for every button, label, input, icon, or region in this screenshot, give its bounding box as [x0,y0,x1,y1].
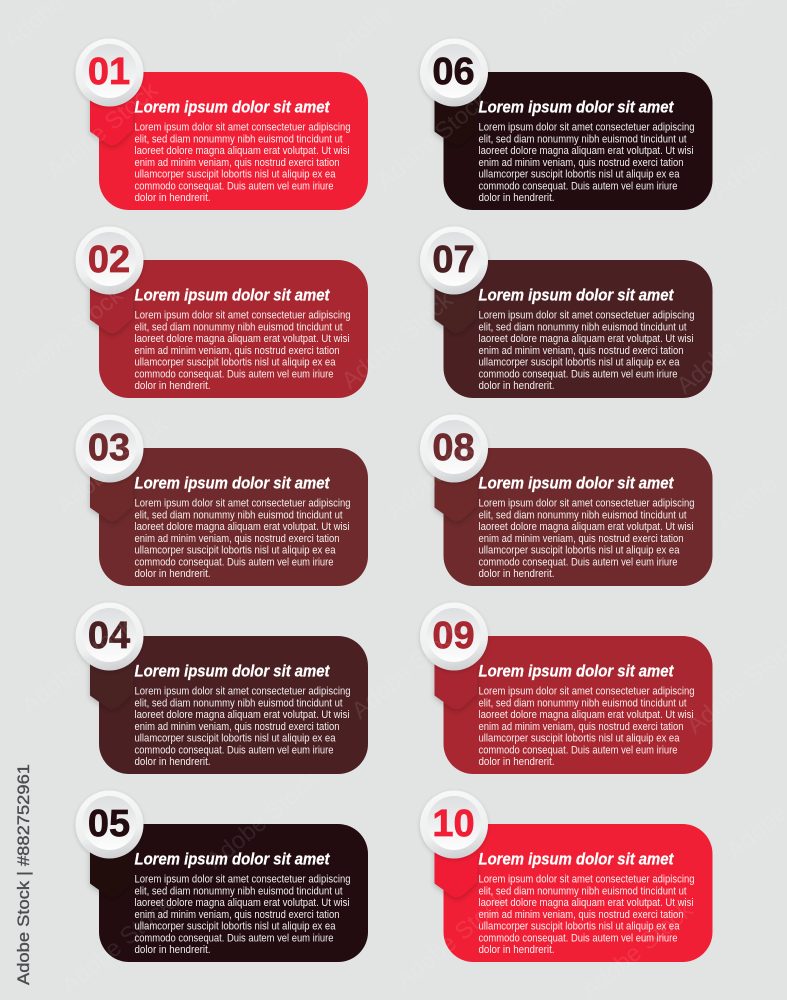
heading: Lorem ipsum dolor sit amet [478,286,675,304]
body text: laoreet dolore magna aliquam erat volutpat. Ut wisi [134,897,350,909]
body text: dolor in hendrerit. [134,380,210,392]
watermark pattern: Adobe Stock [42,76,164,185]
badge: 06: 06 [432,51,475,93]
panel: card 03 background [99,448,368,586]
body text: dolor in hendrerit. [134,568,210,580]
body text: enim ad minim veniam, quis nostrud exerci tation [134,157,340,169]
body text: enim ad minim veniam, quis nostrud exerci tation [134,909,340,921]
body text: ullamcorper suscipit lobortis nisl ut aliquip ex ea [134,168,336,180]
body text: dolor in hendrerit. [478,380,554,392]
badge: 07: 07 [432,239,475,281]
body text: laoreet dolore magna aliquam erat volutpat. Ut wisi [478,521,694,533]
body text: elit, sed diam nonummy nibh euismod tincidunt ut [478,885,686,897]
body text: dolor in hendrerit. [478,944,554,956]
badge: 09 [420,602,488,670]
card 04 [76,602,368,774]
badge: 03 [76,414,144,482]
body text: Lorem ipsum dolor sit amet consectetuer adipiscing [134,310,350,322]
panel: card 01 background [99,72,368,210]
body text: elit, sed diam nonummy nibh euismod tincidunt ut [478,133,686,145]
body text: elit, sed diam nonummy nibh euismod tincidunt ut [134,697,342,709]
body text: enim ad minim veniam, quis nostrud exerci tation [478,909,684,921]
body text: commodo consequat. Duis autem vel eum iriure [134,180,334,192]
badge: 01 [76,38,144,106]
body text: Lorem ipsum dolor sit amet consectetuer adipiscing [134,498,350,510]
body text [478,310,694,392]
body text: ullamcorper suscipit lobortis nisl ut aliquip ex ea [478,544,680,556]
body text: Lorem ipsum dolor sit amet consectetuer adipiscing [478,122,694,134]
card 03 [76,414,368,586]
body text: commodo consequat. Duis autem vel eum iriure [134,368,334,380]
tag: card 01 ribbon [91,100,132,144]
body text: dolor in hendrerit. [478,192,554,204]
vertical stock id text: Adobe Stock | #882752961 [14,764,33,985]
body text: laoreet dolore magna aliquam erat volutpat. Ut wisi [134,333,350,345]
heading: Lorem ipsum dolor sit amet [134,662,331,680]
panel: card 02 background [99,260,368,398]
card 06 [420,38,712,210]
body text: enim ad minim veniam, quis nostrud exerci tation [478,157,684,169]
body text: ullamcorper suscipit lobortis nisl ut aliquip ex ea [478,168,680,180]
panel: card 10 background [444,824,712,962]
body text: elit, sed diam nonummy nibh euismod tincidunt ut [134,133,342,145]
body text: elit, sed diam nonummy nibh euismod tincidunt ut [478,697,686,709]
heading: Lorem ipsum dolor sit amet [134,286,331,304]
body text: dolor in hendrerit. [134,756,210,768]
panel: card 04 background [99,636,368,774]
body text: enim ad minim veniam, quis nostrud exerci tation [478,721,684,733]
card 05 [76,790,368,962]
watermark pattern: Adobe Stock [382,416,504,525]
body text: Lorem ipsum dolor sit amet consectetuer adipiscing [134,122,350,134]
badge: 05: 05 [88,803,130,845]
body text: laoreet dolore magna aliquam erat volutpat. Ut wisi [478,709,694,721]
body text: enim ad minim veniam, quis nostrud exerci tation [134,345,340,357]
body text: dolor in hendrerit. [134,192,210,204]
tag: card 02 ribbon [91,288,132,332]
tag: card 04 ribbon [91,664,132,708]
panel: card 09 background [444,636,712,774]
watermark pattern: Adobe Stock [337,286,459,395]
heading: Lorem ipsum dolor sit amet [478,850,675,868]
body text: commodo consequat. Duis autem vel eum iriure [478,368,678,380]
body text: laoreet dolore magna aliquam erat volutpat. Ut wisi [134,521,350,533]
body text: dolor in hendrerit. [478,568,554,580]
body text: commodo consequat. Duis autem vel eum iriure [478,556,678,568]
badge: 03: 03 [88,427,130,469]
body text: elit, sed diam nonummy nibh euismod tincidunt ut [478,509,686,521]
badge: 04 [76,602,144,670]
heading: Lorem ipsum dolor sit amet [478,474,675,492]
body text: ullamcorper suscipit lobortis nisl ut aliquip ex ea [134,920,336,932]
body text [478,874,694,956]
body text: Lorem ipsum dolor sit amet consectetuer adipiscing [478,874,694,886]
panel: card 06 background [444,72,712,210]
panel: card 08 background [444,448,712,586]
body text: elit, sed diam nonummy nibh euismod tincidunt ut [134,885,342,897]
badge: 10: 10 [432,803,475,845]
body text: commodo consequat. Duis autem vel eum iriure [134,744,334,756]
body text: commodo consequat. Duis autem vel eum iriure [478,180,678,192]
tag: card 03 ribbon [91,476,132,520]
watermark pattern: Adobe Stock [52,411,174,520]
panel: card 07 background [444,260,712,398]
card 10 [420,790,712,962]
tag: card 10 ribbon [436,852,476,896]
badge: 02: 02 [88,239,130,281]
tag: card 05 ribbon [91,852,132,896]
tag: card 09 ribbon [436,664,476,708]
tag: card 07 ribbon [436,288,476,332]
body text: commodo consequat. Duis autem vel eum iriure [478,744,678,756]
watermark pattern: Adobe Stock [202,766,324,875]
body text: dolor in hendrerit. [478,756,554,768]
body text: enim ad minim veniam, quis nostrud exerci tation [134,533,340,545]
heading: Lorem ipsum dolor sit amet [134,850,331,868]
body text: elit, sed diam nonummy nibh euismod tincidunt ut [134,321,342,333]
body text: laoreet dolore magna aliquam erat volutpat. Ut wisi [134,709,350,721]
watermark pattern: Adobe Stock [17,611,139,720]
body text: ullamcorper suscipit lobortis nisl ut aliquip ex ea [478,732,680,744]
body text: ullamcorper suscipit lobortis nisl ut aliquip ex ea [478,356,680,368]
watermark pattern: Adobe [327,0,397,65]
badge: 08: 08 [432,427,475,469]
badge: 04: 04 [88,615,130,657]
body text: laoreet dolore magna aliquam erat volutpat. Ut wisi [478,897,694,909]
body text: laoreet dolore magna aliquam erat volutpat. Ut wisi [478,333,694,345]
body text: ullamcorper suscipit lobortis nisl ut aliquip ex ea [478,920,680,932]
body text: dolor in hendrerit. [134,944,210,956]
watermark pattern: Adobe Stock [347,616,469,725]
body text: enim ad minim veniam, quis nostrud exerci tation [134,721,340,733]
heading: Lorem ipsum dolor sit amet [478,662,675,680]
badge: 08 [420,414,488,482]
panel: card 05 background [99,824,368,962]
card 09 [420,602,712,774]
body text: Lorem ipsum dolor sit amet consectetuer adipiscing [478,498,694,510]
badge: 06 [420,38,488,106]
tag: card 06 ribbon [436,100,476,144]
card 02 [76,226,368,398]
body text [134,498,350,580]
body text: ullamcorper suscipit lobortis nisl ut aliquip ex ea [134,544,336,556]
card 01 [76,38,368,210]
body text: ullamcorper suscipit lobortis nisl ut aliquip ex ea [134,732,336,744]
card 07 [420,226,712,398]
heading: Lorem ipsum dolor sit amet [478,98,675,116]
badge: 10 [420,790,488,858]
body text [478,686,694,768]
badge: 01: 01 [88,51,130,93]
body text: Lorem ipsum dolor sit amet consectetuer adipiscing [478,310,694,322]
body text: commodo consequat. Duis autem vel eum iriure [134,556,334,568]
body text: commodo consequat. Duis autem vel eum iriure [134,932,334,944]
badge: 07 [420,226,488,294]
badge: 02 [76,226,144,294]
card 08 [420,414,712,586]
watermark pattern: Adobe Stock [372,86,494,195]
body text [478,122,694,204]
body text: laoreet dolore magna aliquam erat volutpat. Ut wisi [134,145,350,157]
body text: commodo consequat. Duis autem vel eum iriure [478,932,678,944]
body text: ullamcorper suscipit lobortis nisl ut aliquip ex ea [134,356,336,368]
badge: 09: 09 [432,615,475,657]
heading: Lorem ipsum dolor sit amet [134,474,331,492]
body text [134,874,350,956]
body text [478,498,694,580]
body text: elit, sed diam nonummy nibh euismod tincidunt ut [134,509,342,521]
body text: enim ad minim veniam, quis nostrud exerci tation [478,345,684,357]
body text [134,122,350,204]
watermark pattern: Adobe [712,469,782,535]
watermark pattern: Adobe Stock [392,886,514,995]
badge: 05 [76,790,144,858]
watermark pattern: Adobe Stock [7,281,129,390]
body text: Lorem ipsum dolor sit amet consectetuer adipiscing [478,686,694,698]
heading: Lorem ipsum dolor sit amet [134,98,331,116]
body text: laoreet dolore magna aliquam erat volutpat. Ut wisi [478,145,694,157]
body text [134,686,350,768]
tag: card 08 ribbon [436,476,476,520]
body text [134,310,350,392]
body text: elit, sed diam nonummy nibh euismod tincidunt ut [478,321,686,333]
watermark pattern: Adobe [707,139,777,205]
watermark pattern: Adobe Stock [57,891,179,1000]
body text: Lorem ipsum dolor sit amet consectetuer adipiscing [134,874,350,886]
body text: Lorem ipsum dolor sit amet consectetuer adipiscing [134,686,350,698]
body text: enim ad minim veniam, quis nostrud exerci tation [478,533,684,545]
